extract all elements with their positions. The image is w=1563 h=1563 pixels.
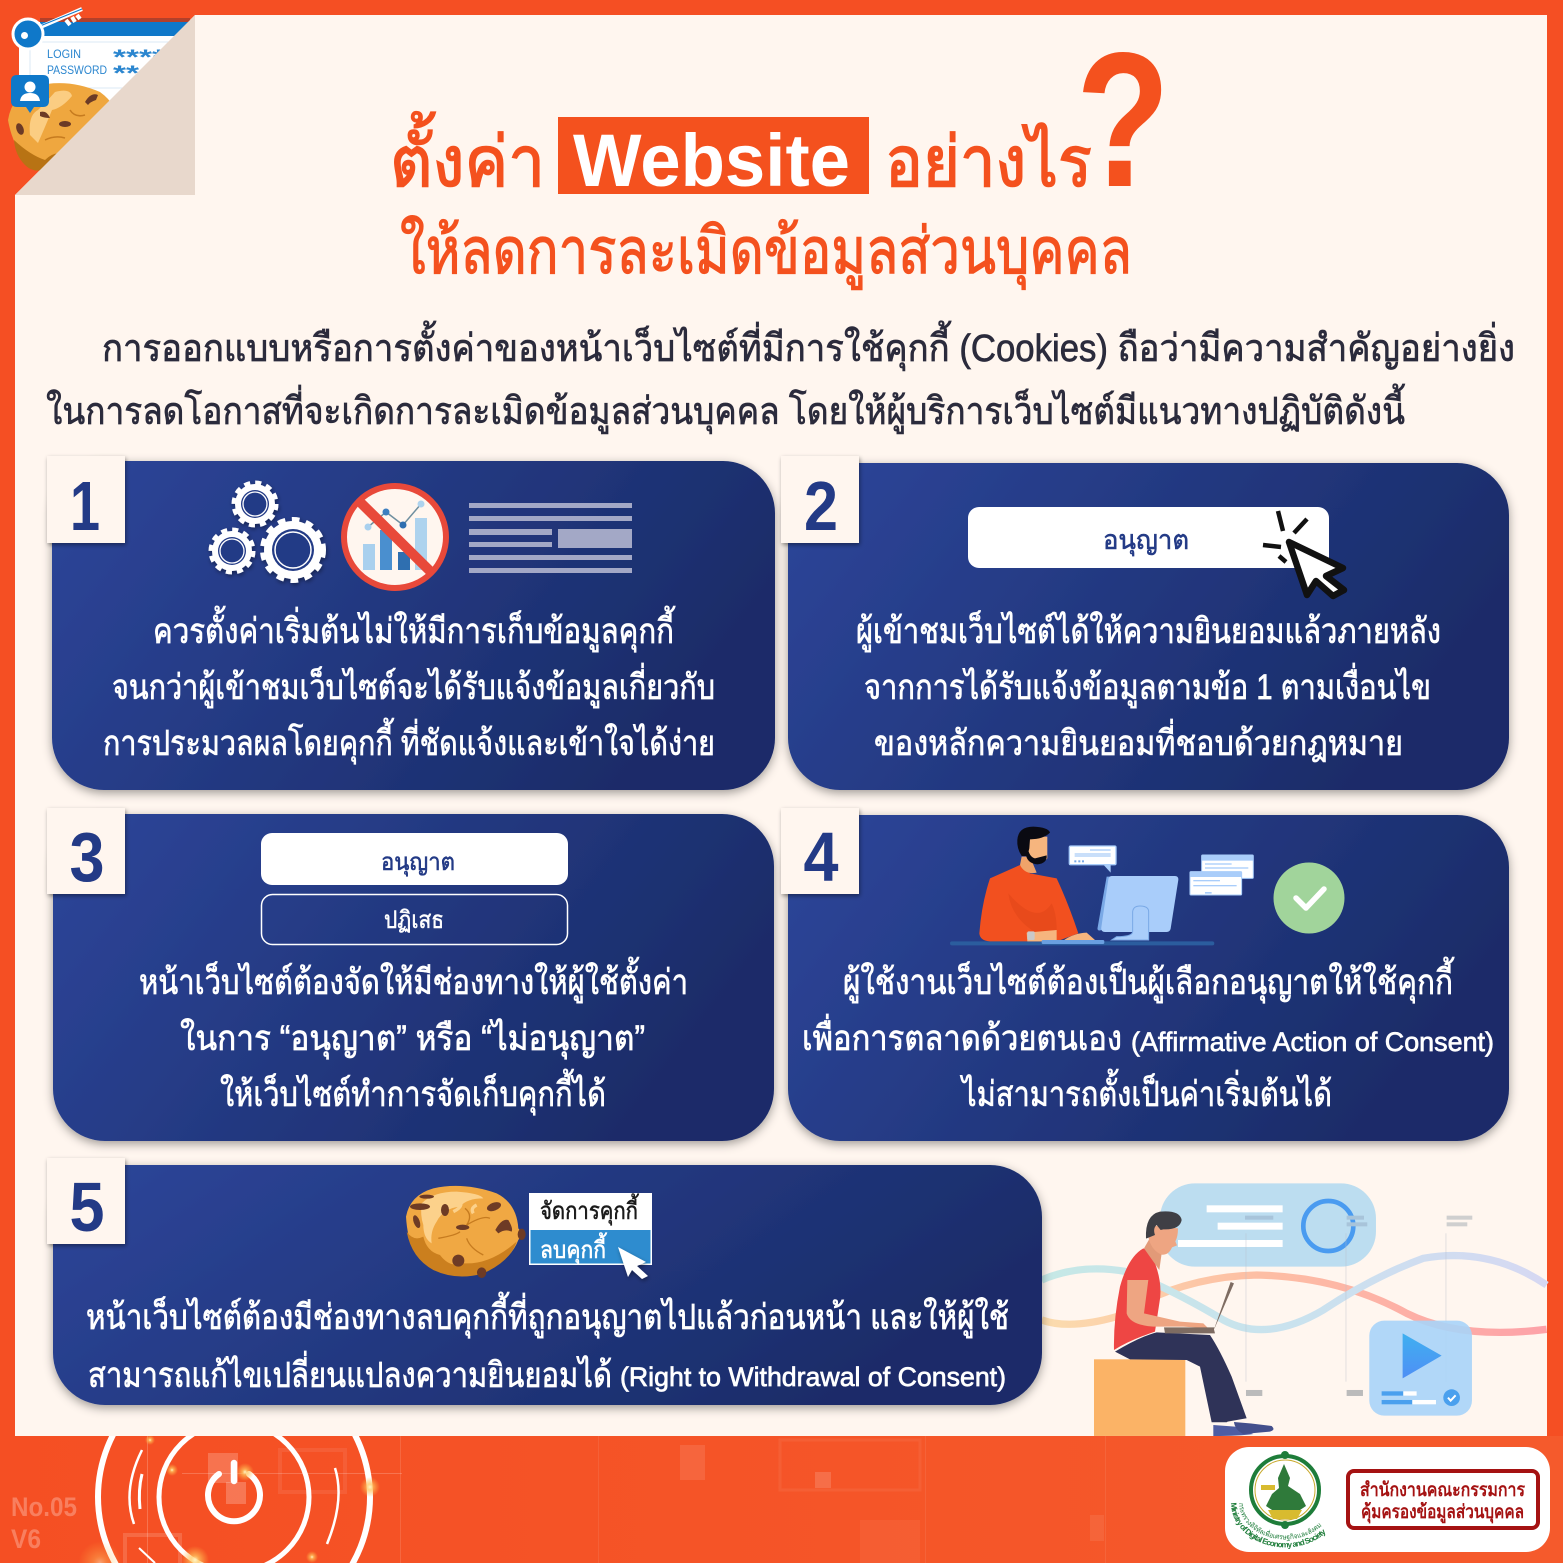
number tab 3 <box>47 808 125 896</box>
step 1 text: ควรตั้งค่าเริ่มต้นไม่ให้มีการเก็บข้อมูลคุกกี้ <box>153 605 676 652</box>
title: ตั้งค่า <box>390 111 545 201</box>
number tab 4: 4 <box>804 818 839 896</box>
delete cookie menu <box>529 1193 652 1279</box>
delete cookie menu: จัดการคุกกี้ <box>540 1193 639 1226</box>
allow button <box>261 833 568 885</box>
step 4 text: (Affirmative Action of Consent) <box>1131 1027 1494 1057</box>
corner illustration: login window with key and cookie: ** <box>113 62 140 85</box>
deny button <box>262 894 568 944</box>
ministry seal: กระทรวงดิจิทัลเพื่อเศรษฐกิจและสังคม <box>1239 1503 1322 1542</box>
panel: step 5 <box>47 1158 1042 1405</box>
step 4 text: ผู้ใช้งานเว็บไซต์ต้องเป็นผู้เลือกอนุญาตให้ใช้คุกกี้ <box>843 956 1455 1003</box>
panel: step 4 <box>781 808 1509 1141</box>
panel: step 1 <box>47 456 775 790</box>
step 2 text <box>856 610 1441 763</box>
edition label: No.05 <box>11 1492 77 1522</box>
number tab 4 <box>781 808 859 896</box>
step 2 text: ผู้เข้าชมเว็บไซต์ได้ให้ความยินยอมแล้วภายหลัง <box>856 610 1441 652</box>
panel: step 2 <box>781 456 1509 790</box>
video card <box>1369 1321 1472 1416</box>
step 1 text: จนกว่าผู้เข้าชมเว็บไซต์จะได้รับแจ้งข้อมูลเกี่ยวกับ <box>112 663 715 708</box>
icon: cursor <box>618 1247 648 1279</box>
icon: user badge <box>11 75 49 113</box>
edition label <box>11 1492 77 1554</box>
icon: green check <box>1274 862 1344 934</box>
step 5 text: หน้าเว็บไซต์ต้องมีช่องทางลบคุกกี้ที่ถูกอนุญาตไปแล้วก่อนหน้า และให้ผู้ใช้ <box>86 1291 1009 1338</box>
step 5 text: สามารถแก้ไขเปลี่ยนแปลงความยินยอมได้ <box>88 1351 612 1395</box>
step 5 text: (Right to Withdrawal of Consent) <box>620 1362 1006 1392</box>
allow button <box>968 507 1329 568</box>
step 3 text: ให้เว็บไซต์ทำการจัดเก็บคุกกี้ได้ <box>220 1068 606 1115</box>
office name box: คุ้มครองข้อมูลส่วนบุคคล <box>1361 1501 1524 1524</box>
corner illustration: login window with key and cookie: LOGIN <box>47 47 81 61</box>
step 3 text: ในการ “อนุญาต” หรือ “ไม่อนุญาต” <box>180 1018 645 1059</box>
icon: key <box>13 9 82 49</box>
title <box>390 12 1170 227</box>
number tab 5 <box>47 1158 125 1246</box>
logo panel <box>1225 1447 1550 1552</box>
step 4 text: ไม่สามารถตั้งเป็นค่าเริ่มต้นได้ <box>960 1068 1332 1114</box>
step 1 text: การประมวลผลโดยคุกกี้ ที่ชัดแจ้งและเข้าใจได้ง่าย <box>103 717 715 764</box>
corner illustration: login window with key and cookie: PASSWORD <box>47 63 107 77</box>
illustration: man at computer <box>950 827 1253 945</box>
allow button: อนุญาต <box>1103 525 1189 557</box>
footer band with power graphic <box>81 1436 1563 1563</box>
number tab 1: 1 <box>70 467 100 545</box>
step 3 text <box>139 956 688 1115</box>
icon: power symbol <box>208 1463 260 1521</box>
number tab 3: 3 <box>70 818 104 896</box>
deny button: ปฏิเสธ <box>384 907 444 934</box>
icon: cookie <box>406 1186 526 1278</box>
title: ? <box>1076 12 1170 227</box>
title: อย่างไร <box>885 123 1092 201</box>
intro paragraph: ในการลดโอกาสที่จะเกิดการละเมิดข้อมูลส่วนบุคคล โดยให้ผู้บริการเว็บไซต์มีแนวทางปฏิบัติดังนี้ <box>46 383 1406 434</box>
step 2 text: จากการได้รับแจ้งข้อมูลตามข้อ 1 ตามเงื่อนไข <box>864 663 1431 708</box>
edition label: V6 <box>11 1524 41 1554</box>
panel: step 3 <box>47 808 774 1141</box>
step 1 text <box>103 605 715 764</box>
step 4 text: เพื่อการตลาดด้วยตนเอง <box>802 1014 1122 1058</box>
corner fold <box>15 0 563 195</box>
corner illustration: login window with key and cookie <box>8 9 191 172</box>
ministry seal: Ministry of Digital Economy and Society <box>1230 1502 1326 1549</box>
icon: no tracking chart <box>344 486 446 588</box>
delete cookie menu: ลบคุกกี้ <box>540 1232 607 1265</box>
number tab 2: 2 <box>804 467 838 545</box>
ministry seal <box>1230 1451 1326 1549</box>
step 2 text: ของหลักความยินยอมที่ชอบด้วยกฎหมาย <box>874 719 1403 763</box>
allow button: อนุญาต <box>381 849 455 877</box>
icon: cursor with click rays <box>1263 511 1344 596</box>
step 5 text <box>86 1291 1009 1395</box>
intro paragraph <box>46 320 1515 434</box>
number tab 2 <box>781 456 859 545</box>
illustration: person with laptop and waves <box>1042 1183 1547 1436</box>
icon: text document lines <box>469 503 632 573</box>
office name box: สำนักงานคณะกรรมการ <box>1360 1480 1526 1501</box>
icon: gears <box>211 483 323 580</box>
corner illustration: login window with key and cookie: **** <box>113 46 166 69</box>
number tab 5: 5 <box>70 1168 104 1246</box>
subtitle: ให้ลดการละเมิดข้อมูลส่วนบุคคล <box>400 215 1132 290</box>
office name box <box>1348 1471 1538 1528</box>
title highlight: Website: Website <box>573 119 850 202</box>
step 3 text: หน้าเว็บไซต์ต้องจัดให้มีช่องทางให้ผู้ใช้ตั้งค่า <box>139 956 688 1003</box>
number tab 1 <box>47 456 125 545</box>
step 4 text <box>802 956 1494 1114</box>
icon: corner cookie <box>8 83 118 172</box>
